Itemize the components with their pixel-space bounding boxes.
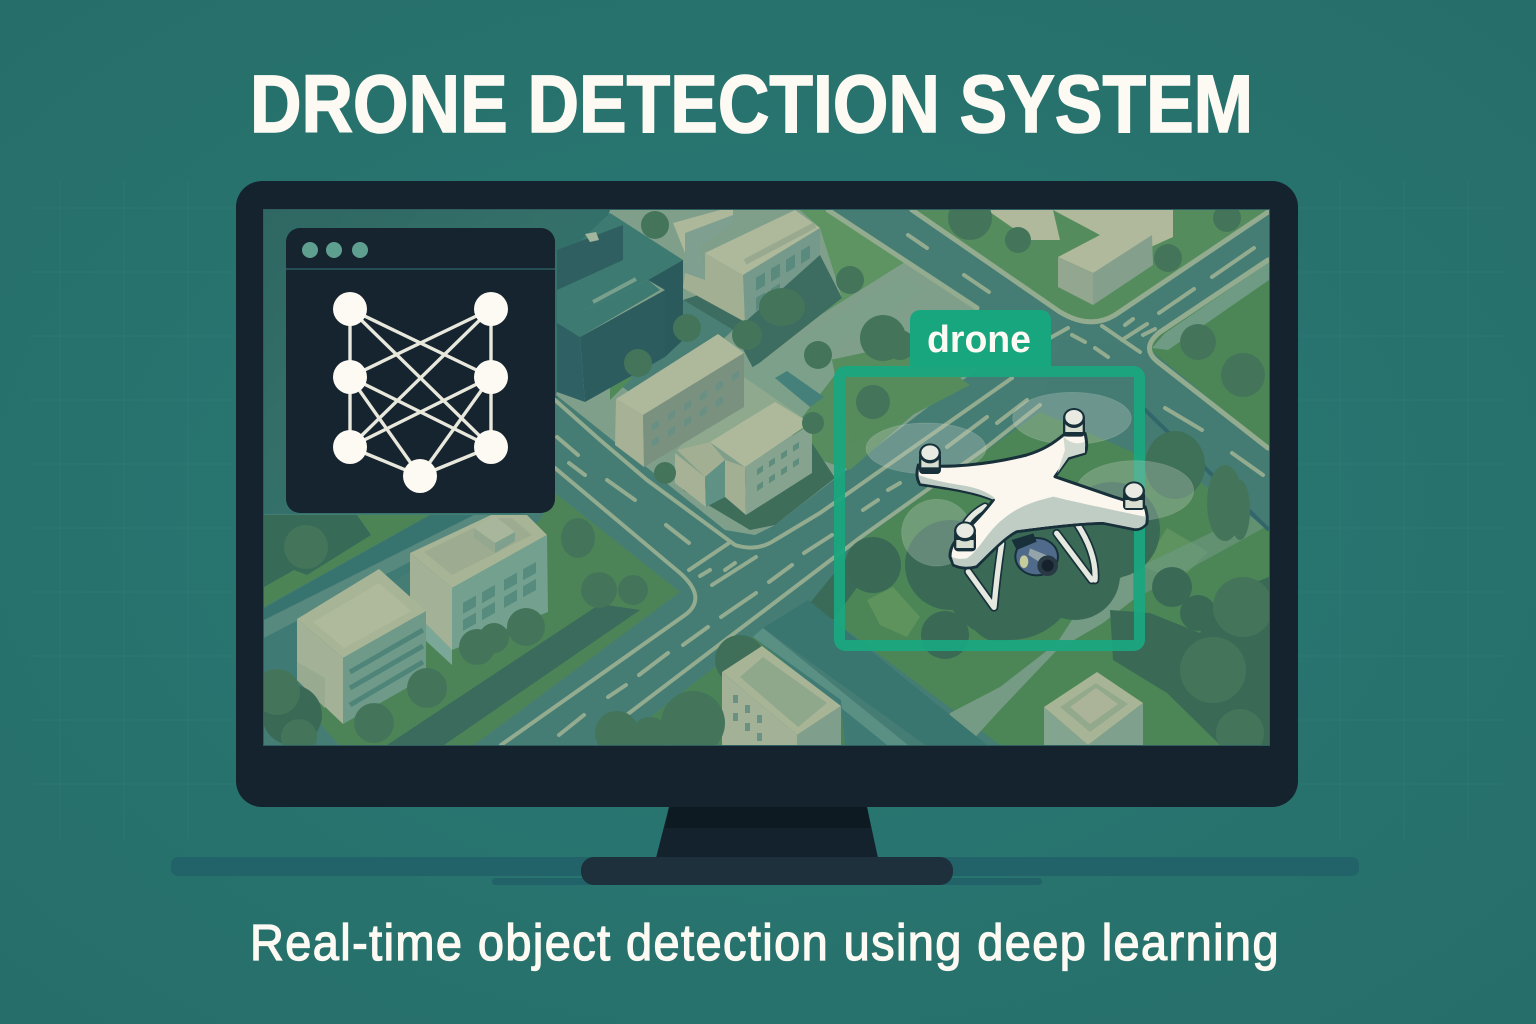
lawn blocks xyxy=(264,210,1269,745)
subtitle: Real-time object detection using deep learning xyxy=(250,915,1279,971)
desk shadow xyxy=(171,857,1359,885)
monitor stand xyxy=(581,807,953,885)
rotor blurs xyxy=(866,392,1194,566)
road network xyxy=(264,407,1269,745)
top right building xyxy=(987,210,1173,305)
network edges xyxy=(350,309,491,476)
road markings xyxy=(501,210,1268,745)
motors xyxy=(919,408,1145,551)
camera gimbal xyxy=(1012,533,1058,576)
window control dots xyxy=(302,242,368,258)
detection label xyxy=(910,310,1051,367)
neural network window xyxy=(286,228,555,513)
dark foliage xyxy=(262,431,1269,745)
centre buildings xyxy=(615,334,812,515)
detection label: drone xyxy=(927,319,1031,361)
front left buildings xyxy=(297,515,548,724)
landing gear xyxy=(962,507,1095,607)
dark building xyxy=(557,213,683,402)
detection box xyxy=(840,372,1140,646)
trees xyxy=(254,196,1273,757)
top building xyxy=(673,210,820,322)
drone body xyxy=(917,433,1147,568)
aerial city scene xyxy=(254,196,1273,757)
monitor xyxy=(236,181,1298,807)
title: DRONE DETECTION SYSTEM xyxy=(250,58,1253,150)
drone xyxy=(866,392,1194,607)
network nodes xyxy=(333,292,508,493)
bottom buildings xyxy=(715,635,1143,750)
